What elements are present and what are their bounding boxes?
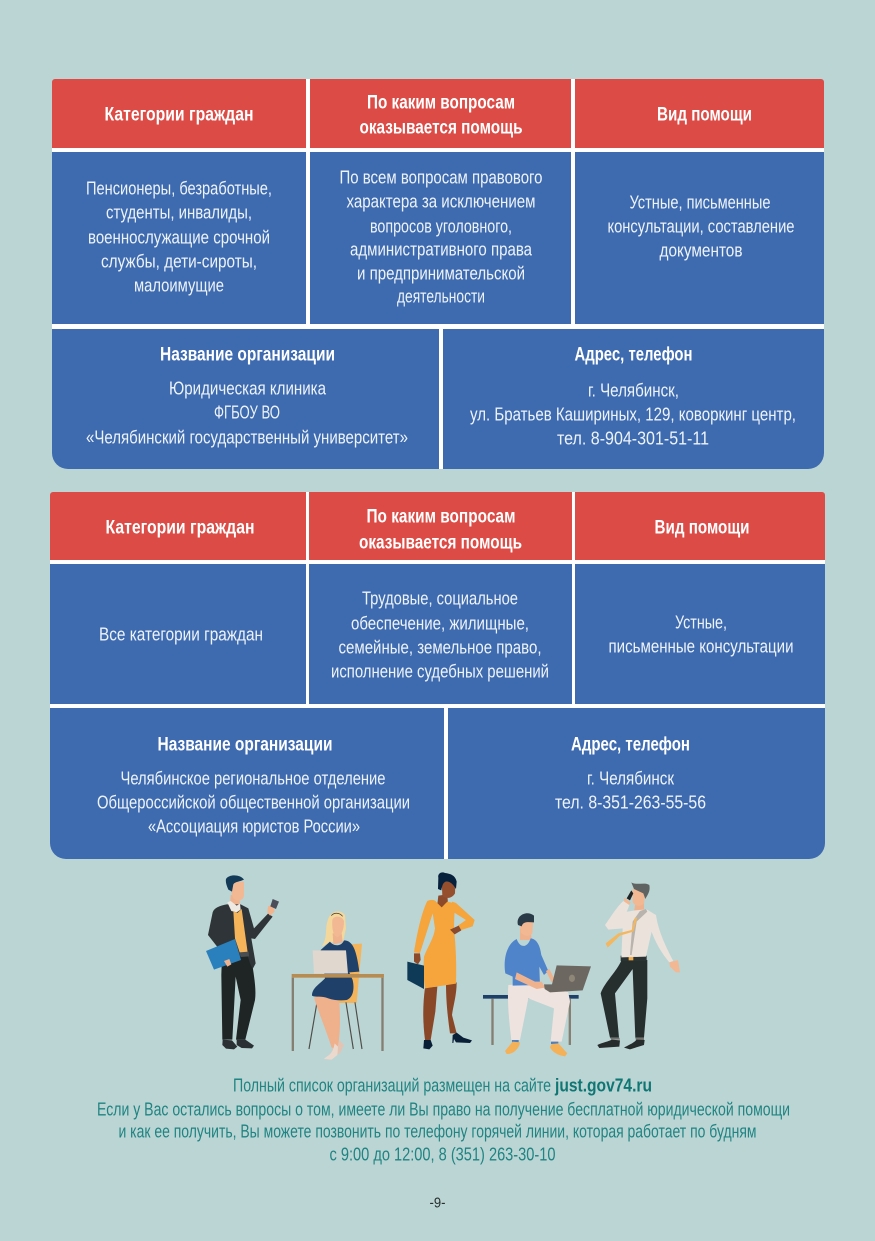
cell: type of help: консультации, составление <box>608 216 794 236</box>
page number: -9- <box>430 1194 446 1212</box>
cell: categories <box>50 564 306 704</box>
cell: organisation: Общероссийской общественной организации <box>97 792 410 812</box>
cell: organisation: Название организации <box>160 344 335 366</box>
header: questions <box>309 492 572 560</box>
cell: questions: По всем вопросам правового <box>340 166 542 188</box>
cell: organisation: ФГБОУ ВО <box>214 402 280 422</box>
cell: questions: и предпринимательской <box>357 262 525 284</box>
cell: questions: Трудовые, социальное <box>362 588 518 608</box>
cell: categories: малоимущие <box>134 274 224 296</box>
header: type of help <box>575 492 825 560</box>
cell: categories: Все категории граждан <box>99 624 263 644</box>
panel: table 1 <box>52 79 824 469</box>
cell: type of help <box>575 564 825 704</box>
cell: categories: службы, дети-сироты, <box>101 250 257 272</box>
cell: address <box>443 329 824 469</box>
header: categories: Категории граждан <box>104 104 254 126</box>
header: categories <box>52 79 306 148</box>
cell: address: ул. Братьев Кашириных, 129, коворкинг центр, <box>470 404 796 424</box>
header: questions: По каким вопросам <box>366 506 516 528</box>
cell: categories: военнослужащие срочной <box>88 226 270 248</box>
cell: questions: исполнение судебных решений <box>331 660 549 682</box>
header: type of help: Вид помощи <box>654 518 750 538</box>
cell: categories <box>52 152 306 324</box>
cell: questions: обеспечение, жилищные, <box>351 612 529 634</box>
cell: questions: семейные, земельное право, <box>338 636 542 658</box>
cell: type of help: документов <box>660 240 743 260</box>
header: questions <box>310 79 571 148</box>
cell: questions <box>309 564 572 704</box>
cell: questions: административного права <box>350 238 533 260</box>
header: type of help: Вид помощи <box>657 104 752 126</box>
header: questions: По каким вопросам <box>367 92 515 114</box>
cell: organisation: Название организации <box>158 734 332 756</box>
cell: type of help: письменные консультации <box>608 636 794 656</box>
cell: address: г. Челябинск, <box>588 380 679 400</box>
cell: questions: деятельности <box>397 286 485 306</box>
cell: address: тел. 8-351-263-55-56 <box>555 792 706 812</box>
cell: organisation: «Ассоциация юристов России» <box>148 816 360 836</box>
panel: table 2 <box>50 492 825 859</box>
figure: woman in orange dress <box>407 872 475 1049</box>
figure: man with laptop on bench <box>483 913 591 1056</box>
cell: address: тел. 8-904-301-51-11 <box>557 428 709 448</box>
cell: categories: студенты, инвалиды, <box>106 202 252 222</box>
cell: type of help: Устные, письменные <box>630 192 770 212</box>
header: type of help <box>575 79 824 148</box>
cell: categories: Пенсионеры, безработные, <box>86 178 272 198</box>
cell: address: г. Челябинск <box>587 768 675 788</box>
cell: questions: характера за исключением <box>346 190 536 212</box>
illustration: people at work <box>206 872 680 1060</box>
cell: type of help: Устные, <box>675 612 727 632</box>
text block: hotline note: Полный список организаций размещен на сайте just.gov74.ru <box>233 1076 652 1096</box>
figure: man on the phone <box>597 882 680 1049</box>
cell: questions <box>310 152 571 324</box>
cell: organisation: Юридическая клиника <box>169 378 327 398</box>
header: questions: оказывается помощь <box>359 532 522 554</box>
text block: hotline note <box>97 1076 790 1164</box>
header: categories: Категории граждан <box>106 518 254 538</box>
cell: type of help <box>575 152 824 324</box>
figure: woman at desk <box>292 911 384 1060</box>
header: categories <box>50 492 306 560</box>
figure: man with folder and phone <box>206 875 279 1049</box>
cell: organisation <box>52 329 439 469</box>
cell: address <box>448 708 825 859</box>
header: questions: оказывается помощь <box>360 118 522 138</box>
cell: organisation: Челябинское региональное отделение <box>120 768 386 788</box>
cell: organisation <box>50 708 444 859</box>
cell: questions: вопросов уголовного, <box>370 216 512 236</box>
text block: hotline note: с 9:00 до 12:00, 8 (351) 263-30-10 <box>330 1144 556 1164</box>
cell: organisation: «Челябинский государственный университет» <box>86 426 408 448</box>
cell: address: Адрес, телефон <box>571 734 690 756</box>
cell: address: Адрес, телефон <box>574 344 692 366</box>
